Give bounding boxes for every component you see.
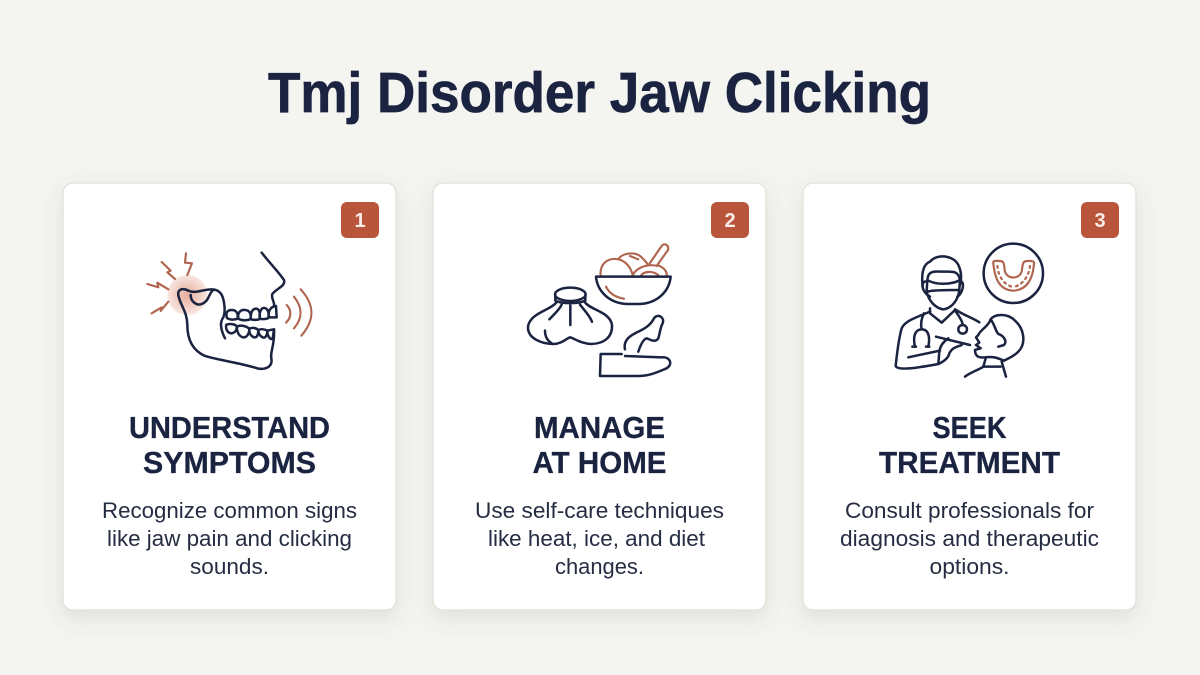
description bbox=[475, 498, 724, 579]
lower teeth bbox=[226, 324, 274, 339]
badge: 3: 3 bbox=[1094, 210, 1106, 232]
description: diagnosis and therapeutic bbox=[840, 526, 1099, 551]
panel: seek treatment: TREATMENT bbox=[879, 445, 1060, 480]
heading: UNDERSTAND bbox=[129, 410, 330, 445]
panel: understand symptoms bbox=[63, 183, 396, 610]
description: sounds. bbox=[190, 554, 269, 579]
badge: 3 bbox=[1081, 202, 1119, 238]
description bbox=[102, 498, 357, 579]
description: like heat, ice, and diet bbox=[488, 526, 706, 551]
heading: SEEK bbox=[932, 410, 1007, 445]
icon: jaw with pain and clicking sound bbox=[147, 253, 311, 369]
icon: ice pack, food bowl and hand bbox=[528, 244, 671, 376]
badge: 2 bbox=[711, 202, 749, 238]
icon: doctor, patient and mouth guard bbox=[896, 244, 1043, 377]
badge: 2: 2 bbox=[724, 210, 736, 232]
panel: manage at home: AT HOME bbox=[532, 445, 666, 480]
description: options. bbox=[930, 554, 1010, 579]
description: like jaw pain and clicking bbox=[107, 526, 352, 551]
description: Consult professionals for bbox=[845, 498, 1095, 523]
heading: MANAGE bbox=[534, 410, 665, 445]
description: changes. bbox=[555, 554, 644, 579]
panel: understand symptoms: SYMPTOMS bbox=[143, 445, 316, 480]
description: Recognize common signs bbox=[102, 498, 357, 523]
panel: manage at home bbox=[433, 183, 766, 610]
description bbox=[840, 498, 1099, 579]
description: Use self-care techniques bbox=[475, 498, 724, 523]
upper teeth bbox=[226, 306, 277, 320]
title: Tmj Disorder Jaw Clicking bbox=[268, 61, 931, 125]
badge: 1 bbox=[341, 202, 379, 238]
panel: seek treatment bbox=[803, 183, 1136, 610]
badge: 1: 1 bbox=[354, 210, 366, 232]
